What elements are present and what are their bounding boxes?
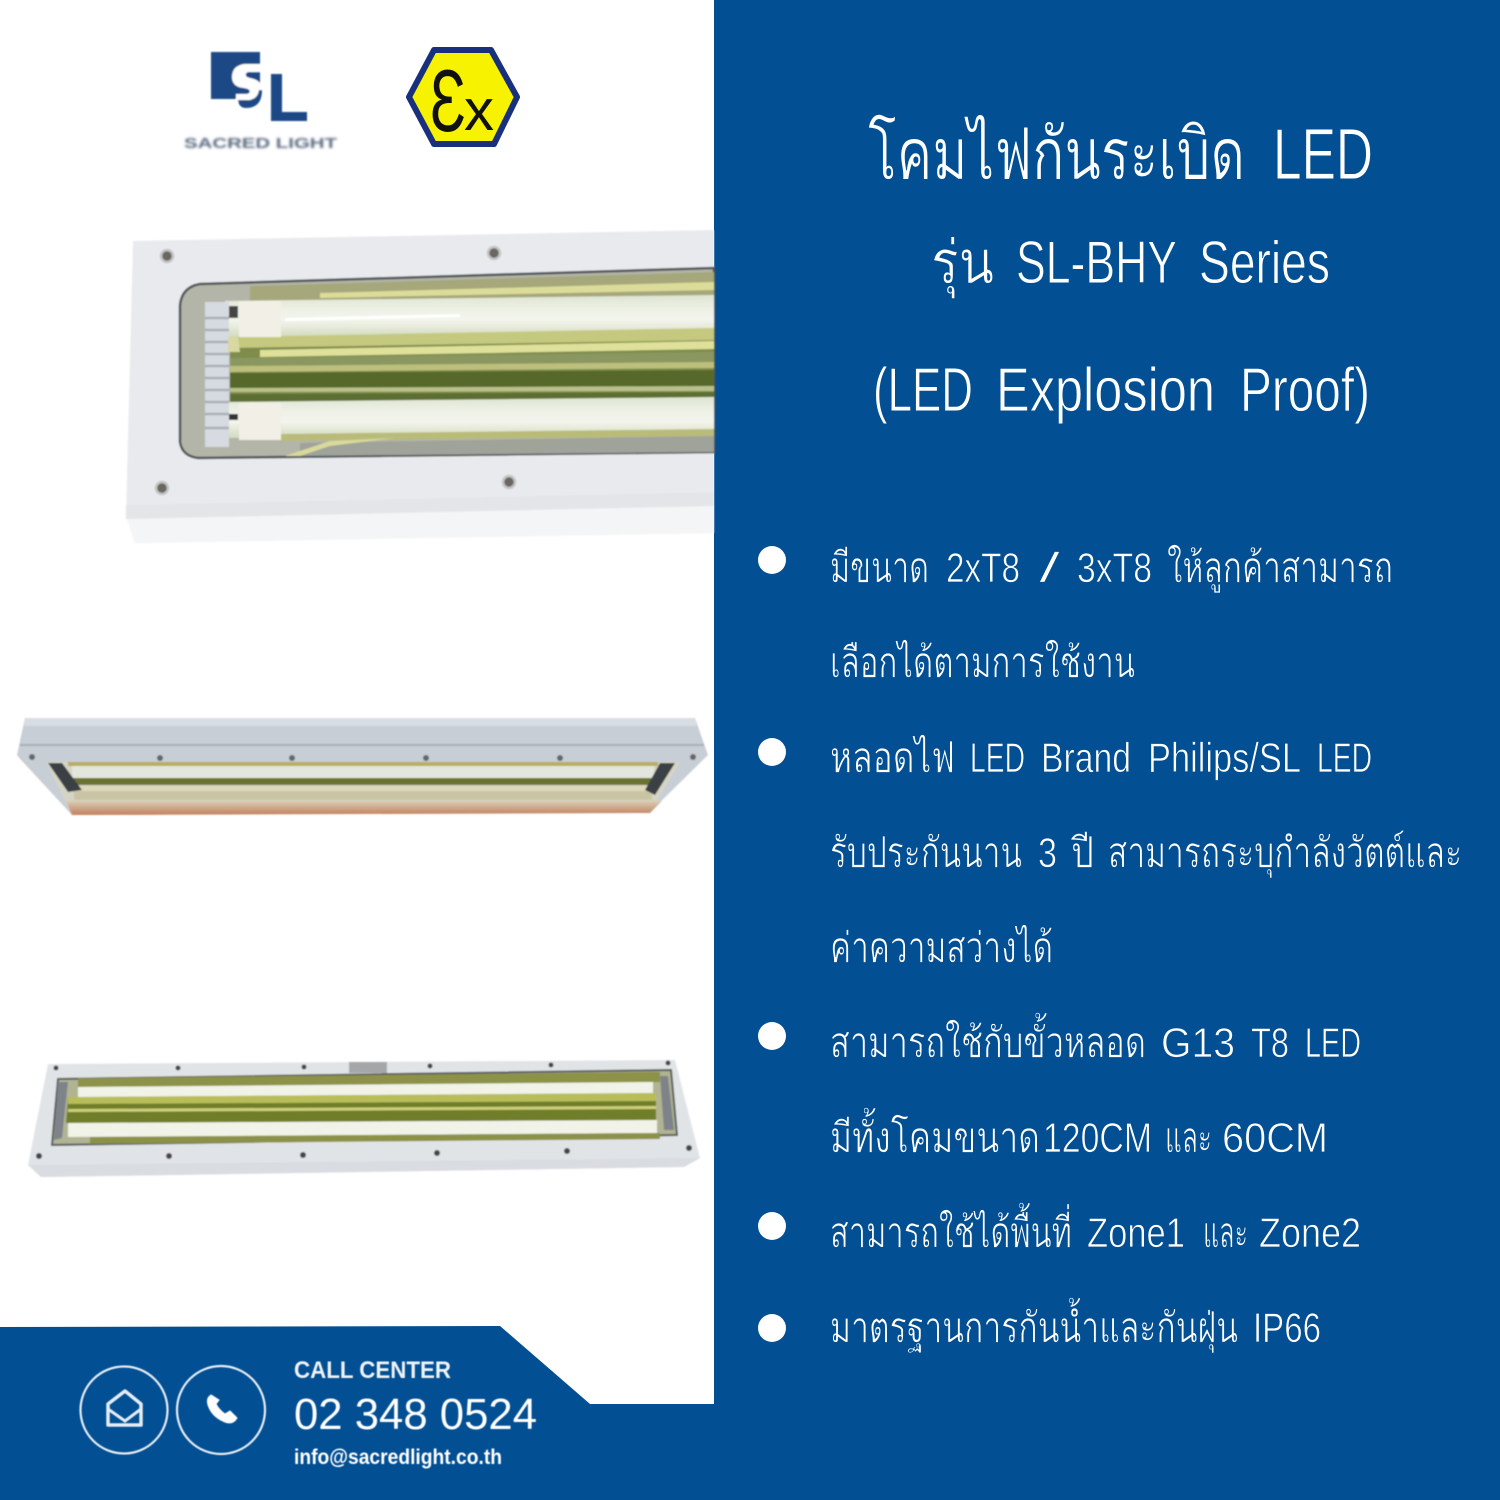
bullet text: และ bbox=[1203, 1209, 1248, 1256]
logo: Sacred Light bbox=[184, 52, 337, 152]
product photo: angled lamp bbox=[17, 718, 708, 815]
bullet text: และ bbox=[1165, 1114, 1212, 1161]
icon: Ex explosion proof mark bbox=[409, 50, 517, 150]
bullet text: Zone1 bbox=[1087, 1209, 1185, 1256]
heading: LED bbox=[1273, 115, 1373, 195]
product photo: front lamp bbox=[28, 1060, 700, 1177]
icon: envelope in circle bbox=[80, 1366, 168, 1454]
bullet text: IP66 bbox=[1253, 1304, 1321, 1351]
bullet text: T8 bbox=[1251, 1019, 1289, 1066]
bullet text: มีทั้งโคมขนาด bbox=[830, 1107, 1040, 1161]
bullet text: สามารถใช้กับขั้วหลอด bbox=[830, 1012, 1146, 1066]
bullet text bbox=[830, 544, 1462, 1354]
bullet text: หลอดไฟ bbox=[830, 734, 955, 781]
green reflector stripes bbox=[230, 326, 714, 404]
bullet text: Zone2 bbox=[1259, 1209, 1361, 1256]
upper reflector band bbox=[250, 272, 714, 302]
bullet text: เลือกได้ตามการใช้งาน bbox=[830, 639, 1135, 686]
bullet text: ค่าความสว่างได้ bbox=[830, 924, 1053, 971]
bullet text: Philips/SL bbox=[1148, 734, 1301, 781]
product photo: large close-up lamp bbox=[126, 230, 714, 543]
tubes bbox=[225, 295, 714, 337]
bullet text: มีขนาด bbox=[830, 544, 929, 591]
bullet text: 2xT8 bbox=[946, 544, 1020, 591]
heading: รุ่น bbox=[931, 229, 994, 299]
heading: Explosion bbox=[996, 356, 1215, 425]
contact text bbox=[294, 1357, 537, 1469]
bullet text: รับประกันนาน bbox=[830, 829, 1022, 876]
icon: phone in circle bbox=[177, 1366, 265, 1454]
screws bbox=[156, 247, 515, 494]
contact text: CALL CENTER bbox=[294, 1357, 451, 1384]
heading: Series bbox=[1199, 229, 1330, 296]
bullet text: 120CM bbox=[1043, 1114, 1152, 1161]
heading: โคมไฟกันระเบิด bbox=[868, 113, 1245, 195]
heading bbox=[868, 113, 1373, 425]
bullet text: 60CM bbox=[1222, 1114, 1328, 1161]
icon: Ex explosion proof mark: x bbox=[464, 78, 494, 143]
contact text: 02 348 0524 bbox=[294, 1390, 537, 1439]
bullet dots bbox=[758, 546, 786, 1342]
bullet text: 3 bbox=[1038, 829, 1057, 876]
tube end caps bbox=[239, 301, 281, 337]
bullet text: G13 bbox=[1161, 1019, 1235, 1066]
bullet text: LED bbox=[1305, 1019, 1361, 1066]
bullet text: LED bbox=[970, 734, 1025, 781]
bullet text: / bbox=[1039, 544, 1061, 591]
bullet text: ปี bbox=[1070, 829, 1094, 876]
bullet text: LED bbox=[1317, 734, 1372, 781]
panel: contact band bbox=[0, 1326, 714, 1500]
heat sink bbox=[205, 302, 229, 447]
bullet text: มาตรฐานการกันน้ำและกันฝุ่น bbox=[830, 1297, 1238, 1354]
heading: Proof) bbox=[1240, 356, 1370, 425]
contact text: info@sacredlight.co.th bbox=[294, 1446, 502, 1469]
bullet text: ให้ลูกค้าสามารถ bbox=[1167, 544, 1393, 593]
logo: Sacred Light: SACRED LIGHT bbox=[184, 136, 337, 152]
heading: (LED bbox=[873, 356, 973, 425]
icon: Ex explosion proof mark: Ɛ bbox=[430, 51, 466, 150]
bullet list bbox=[758, 544, 1462, 1354]
panel: right blue background bbox=[714, 0, 1500, 1500]
heading: SL-BHY bbox=[1016, 229, 1177, 296]
bullet text: Brand bbox=[1041, 734, 1131, 781]
bullet text: สามารถใช้ได้พื้นที่ bbox=[830, 1202, 1072, 1256]
bullet text: 3xT8 bbox=[1077, 544, 1152, 591]
